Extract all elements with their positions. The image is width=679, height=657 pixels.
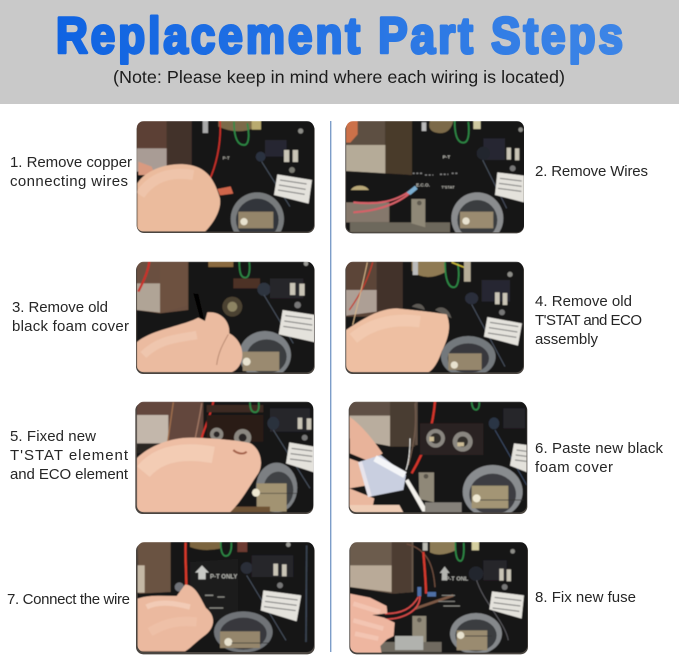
step 4 label: T'STAT and ECO <box>535 312 642 329</box>
step 5 label: T'STAT element <box>10 447 129 464</box>
step 1 photo <box>136 121 315 233</box>
title: Replacement Part Steps <box>56 8 623 65</box>
step 3 photo <box>136 261 317 379</box>
step 2 photo: T'STAT <box>441 184 455 189</box>
step 8 photo: P-T ONL <box>446 576 469 582</box>
step 6 photo <box>349 402 529 518</box>
step 1 label: connecting wires <box>10 173 128 190</box>
center divider <box>330 121 331 652</box>
step 3 label: 3. Remove old <box>12 299 108 316</box>
step 1 label: 1. Remove copper <box>10 154 132 171</box>
step 3 label <box>12 299 129 335</box>
step 6 label: foam cover <box>535 459 613 476</box>
note: (Note: Please keep in mind where each wiring is located) <box>113 67 565 87</box>
step 5 label: 5. Fixed new <box>10 428 96 445</box>
step 4 photo <box>345 262 526 377</box>
step 3 label: black foam cover <box>12 318 129 335</box>
step 2 photo: P-T <box>443 154 450 159</box>
step 5 photo <box>135 402 317 515</box>
step 6 label: 6. Paste new black <box>535 440 664 457</box>
step 5 label: and ECO element <box>10 466 129 483</box>
step 2 photo: E.C.O. <box>416 183 430 188</box>
step 1 label <box>10 154 132 190</box>
step 7 label: 7. Connect the wire <box>7 591 130 608</box>
step 1 photo: P-T <box>223 155 230 160</box>
step 8 photo <box>349 542 530 656</box>
step 2 photo <box>345 121 526 244</box>
step 2 label: 2. Remove Wires <box>535 163 648 180</box>
step 4 label: assembly <box>535 331 598 348</box>
step 7 photo: P-T ONLY <box>210 575 237 581</box>
step 8 label: 8. Fix new fuse <box>535 589 636 606</box>
header banner <box>0 0 679 104</box>
step 6 label <box>535 440 664 476</box>
step 4 label <box>535 293 642 348</box>
step 7 photo <box>136 542 317 655</box>
step 4 label: 4. Remove old <box>535 293 632 310</box>
step 5 label <box>10 428 129 483</box>
